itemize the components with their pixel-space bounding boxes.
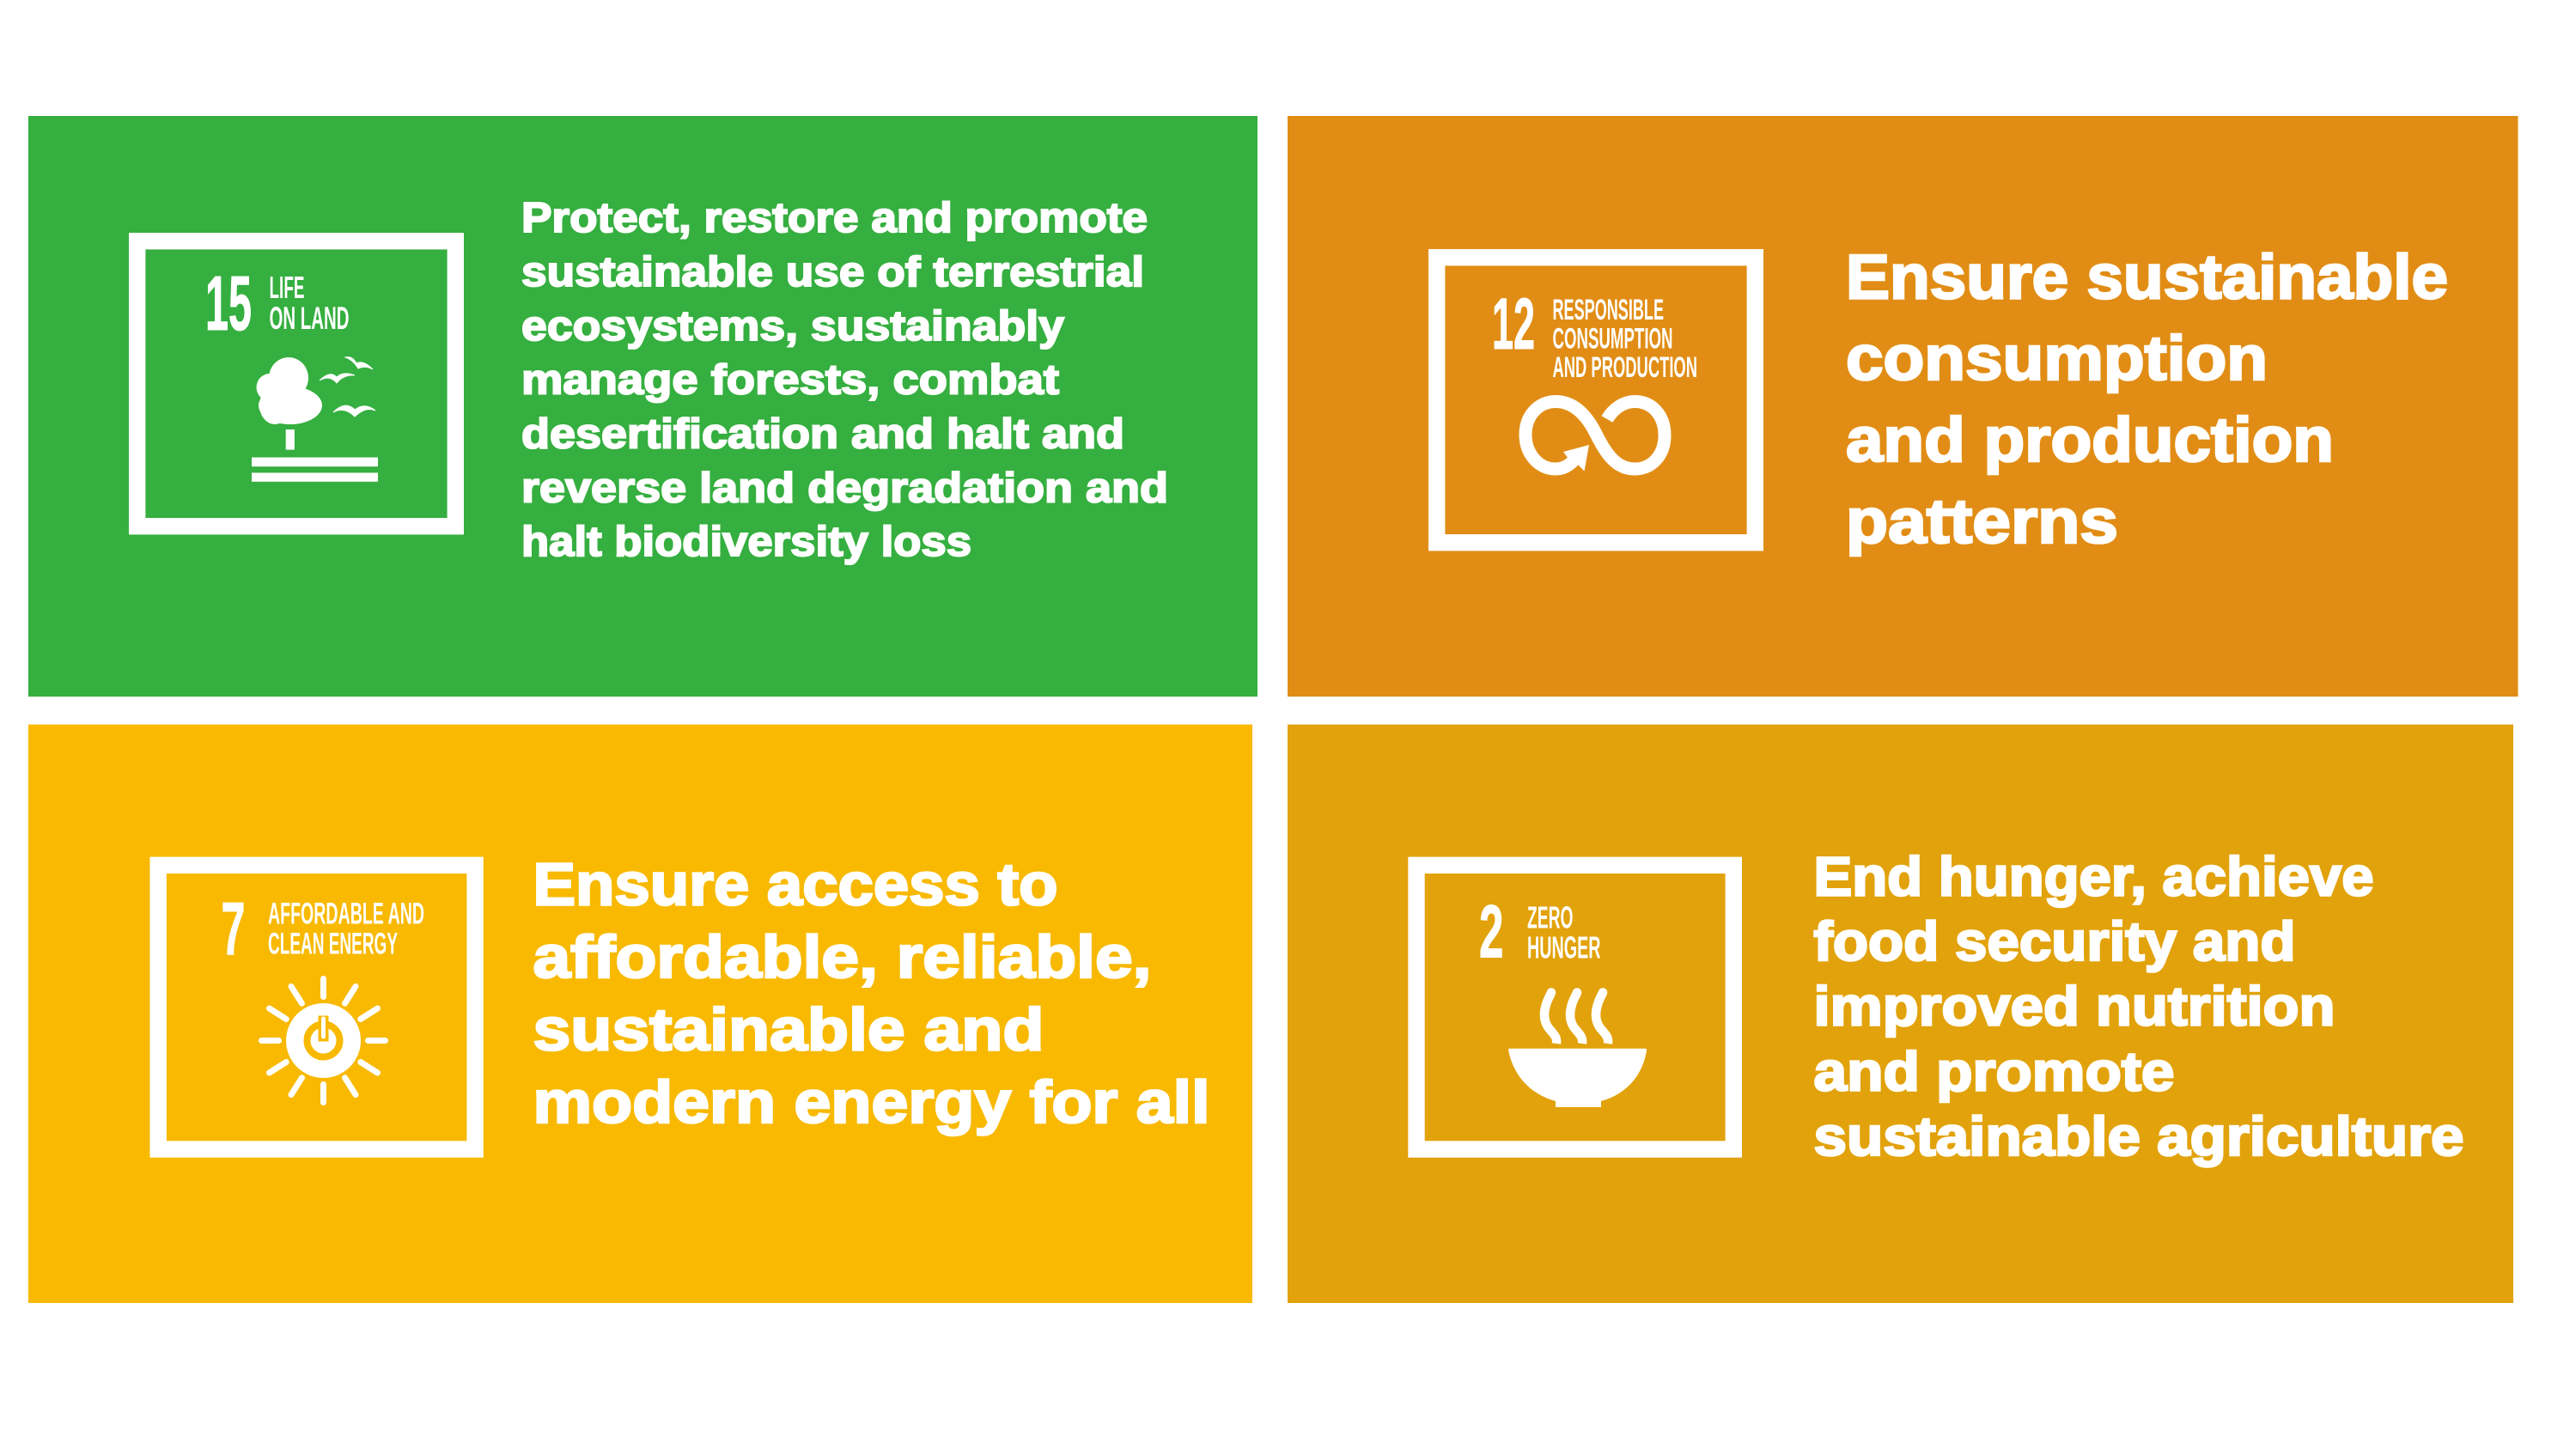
text: goal 2 description [1814, 845, 2463, 1167]
icon: tree [256, 357, 322, 450]
text: goal 15 description [521, 195, 1168, 565]
badge frame [137, 241, 455, 527]
text: goal 12 description: consumption [1846, 324, 2268, 393]
icon: SDG 15 badge [137, 241, 455, 527]
text: goal 15 description: manage forests, combat [521, 357, 1059, 404]
text: goal 7 description: affordable, reliable, [533, 923, 1151, 990]
icon: birds [320, 357, 375, 417]
panel background: orange [1288, 116, 2518, 697]
badge frame [1437, 258, 1755, 543]
text: goal 15 description: ecosystems, sustainably [521, 303, 1064, 350]
icon: ground lines [252, 457, 378, 482]
text: goal 15 description: reverse land degradation and [521, 466, 1168, 512]
text: goal 15 description: desertification and halt and [521, 411, 1124, 457]
goal name: RESPONSIBLE [1553, 294, 1664, 326]
text: goal 12 description: patterns [1846, 487, 2118, 557]
goal number 15: 15 [205, 261, 252, 347]
text: goal 2 description: improved nutrition [1814, 976, 2335, 1038]
icon: infinity loop with arrow [1526, 402, 1665, 471]
badge frame [1416, 865, 1733, 1149]
icon: bowl [1508, 1049, 1647, 1107]
badge frame [158, 865, 475, 1149]
goal name: AFFORDABLE AND [268, 897, 424, 931]
text: goal 12 description [1846, 242, 2448, 557]
text: goal 15 description: sustainable use of terrestrial [521, 249, 1144, 295]
goal name [270, 270, 349, 336]
text: goal 2 description: End hunger, achieve [1814, 845, 2374, 907]
goal name: ZERO [1527, 900, 1574, 935]
panel: SDG 15 life on land [28, 116, 1258, 697]
goal name [1553, 294, 1697, 384]
goal name: LIFE [270, 270, 304, 305]
icon: SDG 2 badge [1416, 865, 1733, 1149]
icon: steam [1544, 988, 1608, 1044]
goal number 12: 12 [1492, 283, 1535, 364]
text: goal 7 description [533, 850, 1209, 1135]
goal number 7: 7 [222, 887, 246, 971]
goal name: HUNGER [1527, 929, 1601, 965]
goal name: CLEAN ENERGY [268, 926, 398, 960]
text: goal 7 description: modern energy for all [533, 1068, 1209, 1135]
text: goal 15 description: Protect, restore and promote [521, 195, 1148, 241]
icon: SDG 12 badge [1437, 258, 1755, 543]
panel: SDG 12 responsible consumption [1288, 116, 2518, 697]
text: goal 2 description: and promote [1814, 1040, 2175, 1102]
text: goal 15 description: halt biodiversity loss [521, 519, 971, 565]
panel: SDG 2 zero hunger [1288, 725, 2513, 1303]
panel background: green [28, 116, 1258, 697]
text: goal 2 description: sustainable agriculture [1814, 1105, 2463, 1167]
goal name: AND PRODUCTION [1553, 351, 1697, 384]
icon: sun with power symbol [261, 979, 385, 1103]
goal number 2: 2 [1479, 890, 1503, 974]
goal name [268, 897, 424, 960]
panel background: mustard [1288, 725, 2513, 1303]
panel background: yellow [28, 725, 1252, 1303]
goal name [1527, 900, 1601, 965]
text: goal 12 description: and production [1846, 405, 2334, 475]
panel: SDG 7 affordable and clean energy [28, 725, 1252, 1303]
goal name: CONSUMPTION [1553, 323, 1673, 356]
text: goal 2 description: food security and [1814, 910, 2295, 972]
icon: SDG 7 badge [158, 865, 475, 1149]
goal name: ON LAND [270, 301, 349, 336]
text: goal 7 description: Ensure access to [533, 850, 1058, 917]
text: goal 12 description: Ensure sustainable [1846, 242, 2448, 313]
text: goal 7 description: sustainable and [533, 996, 1044, 1063]
